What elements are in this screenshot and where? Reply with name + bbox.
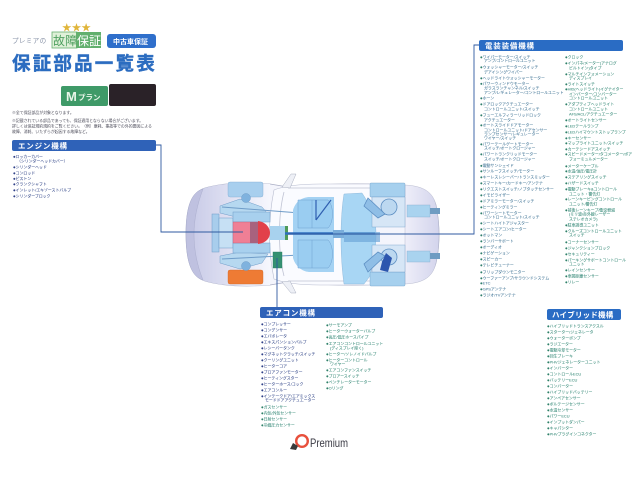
list: electrical parts, right column: ●リレー	[565, 280, 579, 284]
list: hybrid parts: ●コンバーター	[547, 384, 573, 388]
green clutch bar	[285, 226, 288, 240]
brand label: プレミアの	[12, 37, 46, 45]
exhaust mufflers	[407, 205, 430, 262]
list: air conditioning parts, right column: ●エアコンファンスイッチ	[326, 368, 371, 372]
list: electrical parts, left column: ●ドアミラーモーター/スイッチ	[480, 198, 534, 204]
list: electrical parts, right column	[565, 54, 632, 284]
panel heading: engine: エンジン機構	[18, 140, 68, 150]
icon: three gold stars: ★★★	[62, 23, 91, 34]
panel heading: electrical: 電装装備機構	[485, 40, 535, 50]
list: air conditioning parts, left column: ●ヒーターコア	[261, 364, 287, 368]
notes text	[12, 110, 152, 134]
list: hybrid parts: ●パワーECU	[547, 414, 570, 418]
logo: Premium	[290, 435, 348, 450]
list: electrical parts, right column: フォーミュルメーター	[569, 156, 608, 162]
list: electrical parts, right column: ●ジャンクションブロック	[565, 246, 610, 250]
list: electrical parts, left column: ●イモビライザー	[480, 192, 510, 198]
list: hybrid parts: ●PHVジェネレーターユニット	[547, 360, 601, 364]
list: air conditioning parts, left column: ●ヒーターホース/コック	[261, 382, 304, 386]
list: hybrid parts: ●ボルテージセンサー	[547, 402, 585, 406]
windscreen and cabin outline	[270, 184, 372, 285]
list: electrical parts, left column: ●フューエルフィラーリッドロック	[480, 112, 541, 118]
list: electrical parts, right column: ユニット/警告灯	[569, 202, 597, 206]
list: hybrid parts: ●ハイブリッドトランスアクスル	[547, 324, 604, 328]
list: air conditioning parts, left column: ●ヒーティングスター	[261, 376, 299, 380]
list: electrical parts, right column: ●ハザードスイッチ	[565, 180, 599, 186]
list: electrical parts, left column: ランプセンサー/レギュレーター	[484, 132, 539, 136]
list: air conditioning parts, right column: ●サーモアンプ	[326, 322, 352, 328]
list: air conditioning parts, right column: ●ヒーターウォーターバルブ	[326, 328, 375, 334]
radiator tank	[228, 182, 263, 197]
list: electrical parts, left column: コントロールユニット/スイッチ	[484, 214, 540, 220]
logo wordmark: Premium	[310, 436, 348, 450]
list: engine parts: ●ピストン	[13, 176, 31, 181]
list: electrical parts, left column: ●ヘッドライトウォッシャーモーター	[480, 76, 545, 80]
list: hybrid parts: ●コントロールECU	[547, 372, 581, 376]
list: electrical parts, left column: アンプ/コントロールユニット	[484, 58, 535, 63]
notes text: 故障、消耗、いたずらが起因する故障など。	[12, 129, 90, 134]
list: electrical parts, right column: コントロールユニット	[569, 106, 608, 112]
list: hybrid parts: ●回生ブレーキ	[547, 354, 573, 358]
list: electrical parts, right column: ユニット	[569, 262, 585, 266]
list: electrical parts, left column: ●オットマン	[480, 232, 502, 238]
list: air conditioning parts, left column: ●ガスセンサー	[261, 404, 287, 410]
notes text: ※全て保証部品が対象となります。	[12, 110, 74, 115]
list: electrical parts, left column: ●ウーファーアンプ/サラウンドシステム	[480, 276, 549, 280]
wing mirrors	[282, 174, 296, 293]
list: air conditioning parts, right column: ●ヒーター/ソレノイドバルブ	[326, 352, 377, 356]
list: electrical parts, left column: ●パワートランクリッドモーター	[480, 152, 537, 156]
list: electrical parts, right column: ●メーターケーブル	[565, 164, 599, 168]
notes text: ※記載されている部品であっても、保証適用とならない場合がございます。	[12, 118, 143, 123]
list: air conditioning parts, left column: ●エアコンルー	[261, 388, 287, 392]
rear floor block	[341, 193, 376, 284]
list: air conditioning parts, right column: ●高圧/低圧ホースパイプ	[326, 334, 369, 340]
list: electrical parts, left column: デアイシングワイパー	[484, 70, 523, 74]
front bumper band	[186, 189, 203, 280]
list: electrical parts, right column: ●パーキングサポートコントロール	[565, 258, 626, 262]
list: engine parts: ●クランクシャフト	[13, 182, 47, 186]
panel heading: electrical	[479, 40, 623, 51]
seat belts	[316, 200, 331, 220]
list: electrical parts, left column: ●リクエストスイッチ/ノブタッチセンサー	[480, 186, 554, 192]
list: air conditioning parts, left column: ●クーリングユニット	[261, 358, 299, 362]
list: electrical parts, left column: ●サンルーフスイッチ/モーター	[480, 168, 534, 174]
connector: electrical leader line	[288, 45, 480, 234]
list: electrical parts, left column: アクチュエーター	[484, 118, 515, 122]
list: electrical parts, left column: コントロールユニット/スイッチ	[484, 106, 540, 112]
list: electrical parts, left column: ●ウォッシャーモーター/スイッチ	[480, 64, 538, 70]
list: hybrid parts: ●アンペアセンサー	[547, 396, 581, 400]
plan badge: M plan: プラン	[78, 93, 101, 102]
rear suspension	[364, 198, 397, 272]
list: engine parts: ●インレット/エキゾーストバルブ	[13, 188, 71, 192]
list: electrical parts, left column: ●ワイパーモーター/スイッチ	[480, 54, 530, 60]
list: electrical parts, right column: ●LEDテールランプ	[565, 124, 599, 128]
plan badge: M plan	[61, 86, 108, 106]
list: electrical parts, right column: ●クロック	[565, 54, 583, 60]
connector: air conditioning leader line	[276, 258, 278, 307]
list: electrical parts, right column: スイッチ	[569, 232, 585, 238]
list: electrical parts, left column: ●シートエアコン/ヒーター	[480, 226, 527, 232]
list: air conditioning parts, right column: (ディスプレイ除く)	[330, 346, 364, 350]
list: electrical parts, right column: ●水温/油圧/電圧計	[565, 168, 597, 174]
list: electrical parts, left column: ●スピーカー	[480, 256, 502, 262]
list: electrical parts, right column: AFS/ACL/アクチュエーター	[569, 112, 617, 116]
list: electrical parts, right column: ●ライトスイッチ	[565, 82, 595, 86]
list: electrical parts, right column: ステレオカメラ)	[569, 216, 598, 222]
list: air conditioning parts, right column: ●Oリング	[326, 386, 343, 390]
list: electrical parts, left column: ●パワーウィンドウモーター	[480, 81, 529, 86]
list: hybrid parts: ●水温センサー	[547, 408, 573, 412]
list: air conditioning parts, right column: ワイヤー	[330, 362, 346, 366]
front seats	[298, 200, 332, 268]
list: electrical parts, right column: ●レインセンサー	[565, 268, 595, 272]
list: electrical parts, left column: スイッチ/オートクロージャー	[484, 146, 535, 150]
list: air conditioning parts, left column: ●日射センサー	[261, 416, 287, 422]
list: air conditioning parts, left column: ●レシーバータンク	[261, 346, 295, 350]
list: air conditioning parts, left column: ●エキスパンションバルブ	[261, 340, 307, 344]
list: engine parts: ●ロッカーカバー	[13, 154, 43, 159]
list: electrical parts, right column: ●電動ブレーキ&コントロール	[565, 186, 617, 192]
list: hybrid parts: ●ウォーターポンプ	[547, 336, 581, 340]
list: electrical parts, right column: ●コーナーセンサー	[565, 240, 599, 244]
list: electrical parts, right column: ユニット・警告灯	[569, 192, 600, 196]
badge: 中古車保証: 中古車保証	[113, 37, 148, 46]
list: engine parts: ●シリンダーヘッド	[13, 164, 47, 170]
list: electrical parts, left column: ●シートハイトアジャスター	[480, 220, 529, 226]
list: hybrid parts: ●電動冷却モーター	[547, 348, 581, 352]
main title: 保証部品一覧表	[12, 53, 157, 74]
list: electrical parts, right column: (ミリ波/赤外線レーザー	[569, 212, 610, 216]
list: air conditioning parts, left column: ●内気/外気センサー	[261, 410, 296, 416]
list: hybrid parts: ●ハイブリッドバッテリー	[547, 390, 592, 394]
list: electrical parts, left column: アンプ/レギュレーター/コントロールユニット	[484, 90, 564, 95]
list: air conditioning parts, right column: ●ブロアースイッチ	[326, 374, 359, 378]
panel heading: hybrid: ハイブリッド機構	[552, 310, 614, 320]
list: electrical parts, right column: ●マルチインフォメーション	[565, 72, 614, 76]
transmission tunnel	[270, 226, 285, 240]
list: electrical parts, left column: ガラスランチャンネル/スイッチ	[484, 86, 539, 90]
badge: 故障保証	[52, 32, 101, 48]
list: air conditioning parts, left column: モードドアアクチュエーター	[265, 398, 315, 402]
plan badge: dark blank box	[109, 84, 156, 106]
list: electrical parts, right column: ●セキュリティー	[565, 252, 595, 256]
list: air conditioning parts, left column: ●冷媒圧力センサー	[261, 422, 295, 428]
list: electrical parts, right column: ●LEDハイマウントストップランプ	[565, 130, 626, 134]
list: electrical parts, right column: ビルトイン)タイプ	[569, 66, 602, 70]
rear wheel wells	[370, 183, 405, 286]
list: air conditioning parts, left column: ●インテークドア/エアミックス	[261, 394, 315, 398]
list: electrical parts, right column: ●駐車誘導ユニット	[565, 222, 599, 228]
green air conditioning unit	[273, 252, 282, 268]
rear bumper shade	[405, 185, 439, 284]
list: electrical parts, left column: コントロールユニット/ドアセンサー	[484, 128, 547, 132]
list: engine parts: ●シリンダーブロック	[13, 194, 51, 198]
transmission: red dome	[258, 221, 270, 244]
bonnet shade	[186, 183, 270, 286]
engine: pink cylinder block	[233, 222, 258, 243]
list: electrical parts, right column: ●カーテシードアスイッチ	[565, 146, 611, 152]
list: electrical parts, right column: ●スピードメーター/タコメーター/ボア	[565, 152, 632, 156]
cabin blue zone	[293, 197, 334, 272]
list: electrical parts, left column: ●テレビチューナー	[480, 262, 514, 268]
car body outline	[186, 183, 439, 286]
list: air conditioning parts, left column: ●コンプレッサー	[261, 322, 291, 326]
list: air conditioning parts, left column	[261, 322, 315, 428]
list: electrical parts, left column: ●ナビゲーション	[480, 250, 510, 256]
list: electrical parts, left column: ●ラジオ/TVアンテナ	[480, 292, 516, 298]
list: hybrid parts: ●バッテリーECU	[547, 378, 578, 382]
list: engine parts: ●コンロッド	[13, 170, 35, 176]
list: electrical parts, right column: ●ステアリングスイッチ	[565, 174, 607, 180]
list: electrical parts, left column: ●ランバーサポート	[480, 238, 514, 244]
list: electrical parts, left column: スイッチ/オートクロージャー	[484, 156, 535, 162]
list: electrical parts, left column: ●ドアロックアクチュエーター	[480, 102, 533, 106]
list: electrical parts, left column: ●ETC	[480, 280, 491, 286]
list: electrical parts, right column: ●マップライトユニット/スイッチ	[565, 140, 623, 146]
icon: logo ring	[290, 435, 308, 450]
list: hybrid parts: ●スターター/ジェネレータ	[547, 330, 594, 334]
list: engine parts	[13, 154, 71, 198]
list: electrical parts, right column: インバーター/コンバーター	[569, 92, 617, 96]
list: electrical parts, right column: ●HID(ヘッドライト)イグナイター	[565, 86, 624, 92]
list: air conditioning parts, right column: ●エアコンコントロールユニット	[326, 341, 383, 346]
panel heading: air conditioning: エアコン機構	[266, 308, 316, 318]
list: electrical parts, right column: ディスプレイ	[569, 76, 592, 80]
list: hybrid parts: ●インバーター	[547, 366, 573, 370]
list: electrical parts, right column: コントロールユニット	[569, 96, 608, 100]
panel heading: engine	[12, 140, 156, 151]
list: electrical parts, left column: ●パワーシートモーター	[480, 210, 522, 216]
orange battery box	[228, 270, 263, 284]
list: air conditioning parts, left column: ●ブロアファンモーター	[261, 370, 303, 374]
list: electrical parts, left column: ●スマートキー/カードキー/アンテナ	[480, 180, 543, 186]
list: engine parts: （シリンダーヘッドカバー）	[17, 158, 68, 164]
plan badge: M plan: M	[66, 89, 77, 104]
badge: 故障保証: 故障	[53, 33, 77, 48]
panel heading: hybrid	[547, 309, 621, 320]
list: air conditioning parts, right column: ●ベンチレーターモーター	[326, 380, 372, 384]
list: electrical parts, left column: ●電動サンシェイド	[480, 163, 514, 168]
list: electrical parts, left column: ●オーディオ	[480, 244, 502, 250]
notes text: 詳しくは保証規約規約をご覧ください。（例）摩耗、事故等での外的要因による	[12, 124, 152, 128]
list: hybrid parts: ●キャパシター	[547, 426, 573, 430]
list: hybrid parts: ●PHVプラグインコネクター	[547, 432, 597, 436]
list: electrical parts, right column: ●キーセンサー	[565, 136, 591, 140]
front suspension and engine bay	[212, 194, 300, 270]
list: electrical parts, right column: ●クルーズコントロールユニット	[565, 228, 622, 234]
list: air conditioning parts, left column: ●エバポレータ	[261, 334, 287, 338]
list: electrical parts, left column: ●フリップダウンモニター	[480, 270, 526, 274]
central drive shaft	[285, 232, 375, 235]
list: air conditioning parts, left column: ●マグネットクラッチ/スイッチ	[261, 352, 315, 356]
list: electrical parts, right column: ●前後レーンキープ/衝突軽減	[565, 208, 615, 212]
list: electrical parts, left column: ●ヒーティングミラー	[480, 204, 518, 210]
list: electrical parts, left column: ワイヤー/スイッチ	[484, 136, 516, 140]
list: air conditioning parts, left column: ●コンデンサー	[261, 328, 287, 332]
header: warranty title block	[12, 23, 157, 74]
list: electrical parts, right column: ●インパネ/メーター(アナログ	[565, 60, 617, 66]
list: electrical parts, left column	[480, 54, 564, 298]
badge: 故障保証: 保証	[77, 34, 101, 48]
list: electrical parts, left column: ●パワーテールゲートモーター	[480, 142, 533, 146]
list: electrical parts, left column: ●オートスライドドアモーター	[480, 122, 533, 128]
badge: 中古車保証	[107, 34, 156, 48]
list: electrical parts, right column: ●アダプティブヘッドライト	[565, 102, 614, 106]
list: electrical parts, left column: ●ホーン	[480, 96, 494, 100]
list: air conditioning parts, right column: ●ヒーターコントロール	[326, 358, 368, 362]
list: hybrid parts: ●インプットダンパー	[547, 420, 585, 424]
list: air conditioning parts, right column	[326, 322, 383, 390]
list: electrical parts, left column: ●GPSアンテナ	[480, 286, 506, 292]
list: hybrid parts	[547, 324, 604, 436]
panel heading: air conditioning	[260, 307, 383, 318]
connector: engine leader line	[156, 145, 243, 232]
rear shock detail	[380, 253, 392, 272]
list: electrical parts, right column: ●車間距離センサー	[565, 274, 599, 278]
list: electrical parts, left column: ●キーレスレシーバー/トランスミッター	[480, 174, 550, 180]
list: electrical parts, right column: ●オートライトセンサー	[565, 118, 607, 122]
diagram: car cutaway top view	[186, 174, 440, 293]
list: hybrid parts: ●ラジエーター	[547, 342, 573, 346]
list: electrical parts, right column: ●レーンキーピングコントロール	[565, 196, 622, 202]
